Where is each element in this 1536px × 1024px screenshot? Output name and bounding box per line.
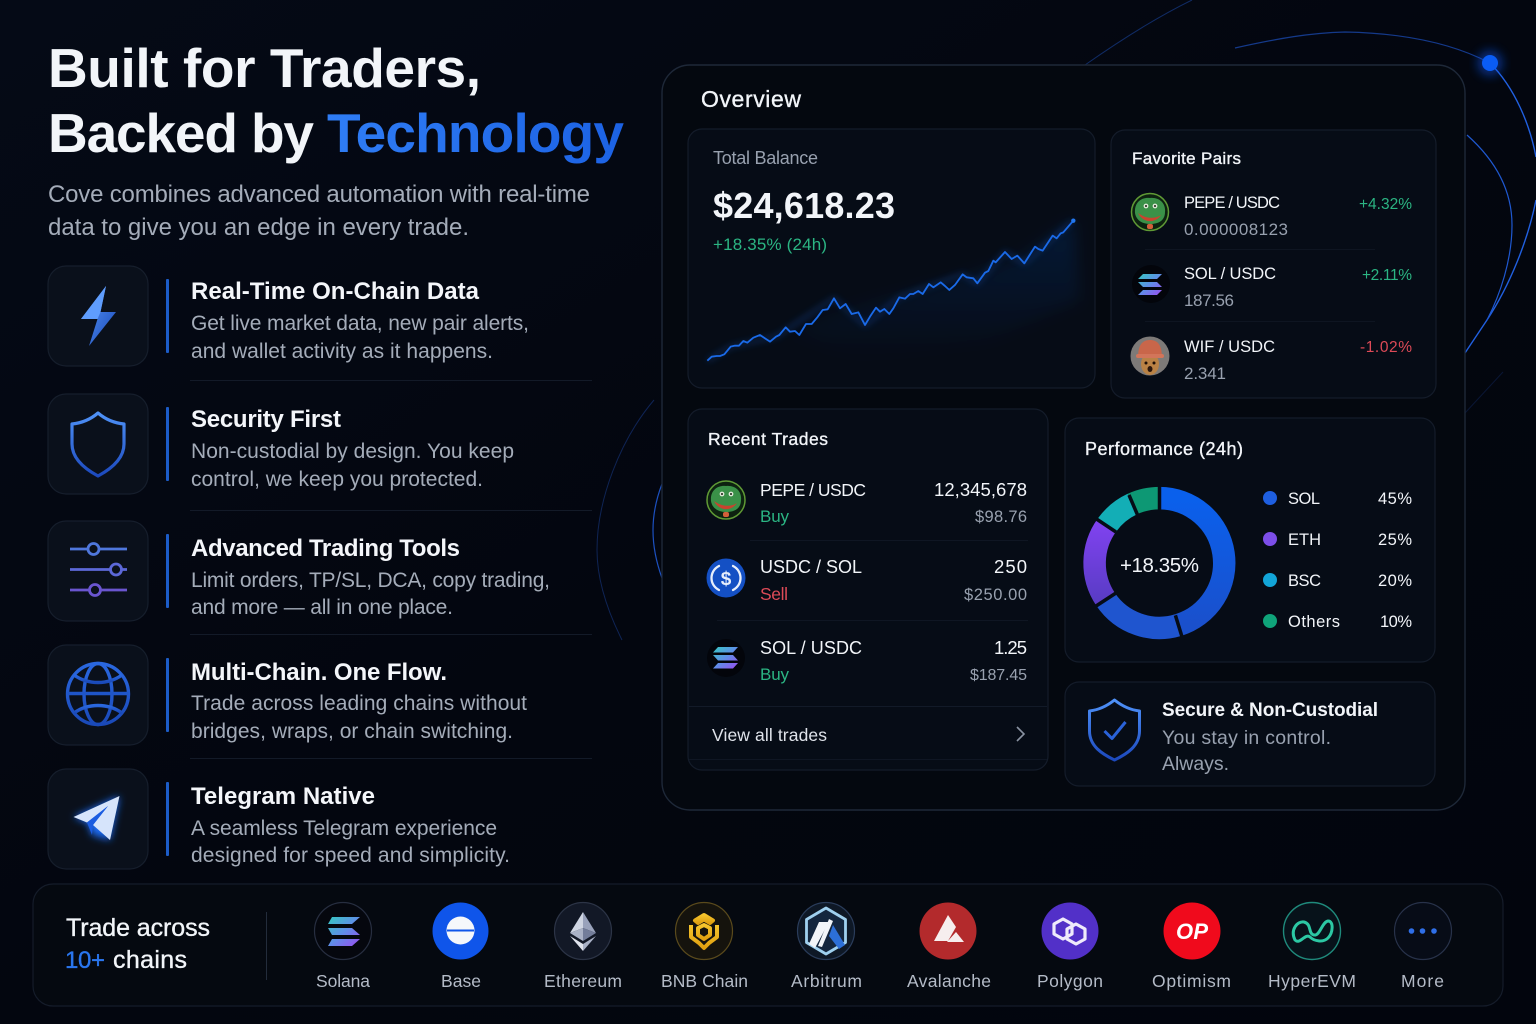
pair: SOL	[1132, 265, 1412, 310]
icon: paper plane	[48, 769, 148, 869]
panel: total balance: +18.35% (24h)	[713, 235, 827, 254]
icon: pepe	[707, 481, 745, 519]
trade: SOL: 1.25	[994, 637, 1027, 658]
subtitle	[48, 181, 590, 241]
panel: secure callout	[1065, 682, 1435, 786]
panel: total balance: $24,618.23	[713, 185, 895, 226]
feature: telegram: designed for speed and simplicity.	[191, 844, 510, 867]
chain: polygon: Polygon	[1037, 971, 1103, 991]
feature: trading tools	[48, 521, 550, 621]
panel: performance	[1065, 418, 1435, 662]
heading: trade across: 10+	[65, 947, 105, 974]
link: view all trades	[712, 725, 1024, 745]
link: view all trades: View all trades	[712, 725, 827, 745]
feature: trading tools: Advanced Trading Tools	[191, 535, 460, 562]
feature: real-time data: and wallet activity as it happens.	[191, 340, 493, 363]
trade: USDC: $250.00	[964, 586, 1027, 604]
icon: wif dog	[1130, 336, 1170, 376]
panel: total balance	[688, 129, 1095, 388]
chain: optimism: Optimism	[1152, 971, 1231, 991]
icon: shield check	[1090, 700, 1140, 760]
legend: 25%	[1378, 531, 1412, 549]
legend	[1263, 490, 1412, 631]
chain: solana	[314, 902, 372, 991]
pair: WIF: WIF / USDC	[1184, 338, 1275, 356]
feature: security	[48, 394, 514, 494]
trade: PEPE: PEPE / USDC	[760, 480, 866, 500]
icon: usdc	[706, 558, 746, 598]
title: Backed by	[48, 102, 314, 164]
feature: security: control, we keep you protected.	[191, 468, 483, 491]
chain: solana: Solana	[316, 971, 370, 991]
feature: real-time data: Real-Time On-Chain Data	[191, 278, 480, 305]
pair: WIF	[1130, 336, 1412, 383]
chain: polygon	[1037, 902, 1103, 991]
title: Built for Traders,	[48, 37, 481, 99]
heading: trade across: Trade across	[66, 914, 210, 942]
heading: overview: Overview	[701, 86, 801, 112]
feature: telegram: A seamless Telegram experience	[191, 817, 497, 840]
feature: multi-chain: bridges, wraps, or chain switching.	[191, 720, 513, 743]
feature: trading tools: and more — all in one place.	[191, 596, 453, 619]
feature: telegram	[48, 769, 510, 869]
title	[48, 37, 624, 164]
pair: WIF: 2.341	[1184, 364, 1226, 383]
icon: globe	[48, 645, 148, 745]
feature: multi-chain	[48, 645, 527, 745]
donut chart	[1093, 485, 1224, 640]
chain: avalanche	[907, 902, 991, 991]
icon: shield	[48, 394, 148, 494]
panel: recent trades	[688, 409, 1048, 770]
trade: USDC: Sell	[760, 584, 788, 604]
legend: Others	[1288, 613, 1340, 631]
pair: SOL: 187.56	[1184, 291, 1234, 310]
panel: favorite pairs: Favorite Pairs	[1132, 149, 1241, 168]
chain: more	[1394, 902, 1452, 991]
trade: PEPE: 12,345,678	[934, 479, 1027, 500]
chain: base: Base	[441, 971, 481, 991]
chain: bnb	[661, 902, 748, 991]
icon: pepe	[1132, 194, 1168, 230]
trade: USDC	[706, 556, 1027, 604]
pair: PEPE: PEPE / USDC	[1184, 194, 1280, 212]
feature: telegram: Telegram Native	[191, 783, 375, 810]
feature list	[48, 266, 592, 869]
legend: ETH	[1288, 531, 1321, 549]
feature: real-time data: Get live market data, new pair alerts,	[191, 312, 529, 335]
feature: trading tools: Limit orders, TP/SL, DCA, copy trading,	[191, 569, 550, 592]
pair: SOL: SOL / USDC	[1184, 265, 1276, 283]
chain: arbitrum	[791, 902, 862, 991]
trade: PEPE: $98.76	[975, 508, 1027, 526]
pair: WIF: -1.02%	[1360, 339, 1412, 356]
panel: overview	[662, 65, 1465, 810]
icon: lightning bolt	[48, 266, 148, 366]
panel: recent trades: Recent Trades	[708, 429, 828, 449]
glowing node	[1477, 50, 1503, 76]
trade: PEPE	[707, 479, 1027, 526]
decorative orbit lines	[597, 0, 1536, 640]
panel: favorite pairs	[1111, 130, 1436, 398]
legend: 10%	[1380, 613, 1412, 631]
chain: optimism	[1152, 902, 1231, 991]
subtitle: data to give you an edge in every trade.	[48, 214, 469, 241]
chain: avalanche: Avalanche	[907, 971, 991, 991]
pair: PEPE	[1132, 194, 1412, 239]
feature: multi-chain: Trade across leading chains without	[191, 692, 527, 715]
feature: security: Non-custodial by design. You keep	[191, 440, 514, 463]
chain: hyperevm: HyperEVM	[1268, 971, 1356, 991]
icon: solana	[707, 639, 745, 677]
trade: PEPE: Buy	[760, 507, 790, 526]
chain: arbitrum: Arbitrum	[791, 971, 862, 991]
icon: sliders	[48, 521, 148, 621]
chain: ethereum: Ethereum	[544, 971, 622, 991]
feature: security: Security First	[191, 406, 341, 433]
chain: more: More	[1401, 971, 1444, 991]
donut chart: +18.35%	[1120, 554, 1199, 577]
pair: SOL: +2.11%	[1362, 267, 1412, 284]
panel: secure callout: Always.	[1162, 753, 1229, 775]
heading: trade across	[65, 914, 210, 974]
trade: SOL: Buy	[760, 665, 790, 684]
icon: usdc: $	[721, 569, 732, 590]
heading: trade across: chains	[113, 946, 187, 974]
legend: BSC	[1288, 572, 1321, 590]
trade: USDC: 250	[994, 556, 1027, 577]
trade: SOL	[707, 637, 1027, 684]
chain: ethereum	[544, 902, 622, 991]
icon: solana	[1132, 265, 1170, 303]
feature: multi-chain: Multi-Chain. One Flow.	[191, 659, 447, 686]
legend: 20%	[1378, 572, 1412, 590]
legend: SOL	[1288, 490, 1320, 508]
pair: PEPE: +4.32%	[1359, 196, 1412, 213]
trade: SOL: SOL / USDC	[760, 638, 862, 658]
panel: secure callout: You stay in control.	[1162, 727, 1331, 749]
line chart: balance	[707, 218, 1080, 361]
panel: performance: Performance (24h)	[1085, 439, 1243, 459]
trade: SOL: $187.45	[970, 667, 1027, 684]
chain: hyperevm	[1268, 902, 1356, 991]
legend: 45%	[1378, 490, 1412, 508]
panel: total balance: Total Balance	[713, 148, 818, 168]
chain: optimism: OP	[1176, 919, 1208, 944]
chain: base	[432, 902, 488, 991]
panel: chains bar	[33, 884, 1503, 1006]
pair: PEPE: 0.000008123	[1184, 220, 1288, 239]
chain: bnb: BNB Chain	[661, 971, 748, 991]
trade: USDC: USDC / SOL	[760, 557, 862, 577]
feature: real-time data	[48, 266, 529, 366]
panel: secure callout: Secure & Non-Custodial	[1162, 700, 1378, 721]
subtitle: Cove combines advanced automation with real-time	[48, 181, 590, 208]
title: Technology	[327, 102, 624, 164]
